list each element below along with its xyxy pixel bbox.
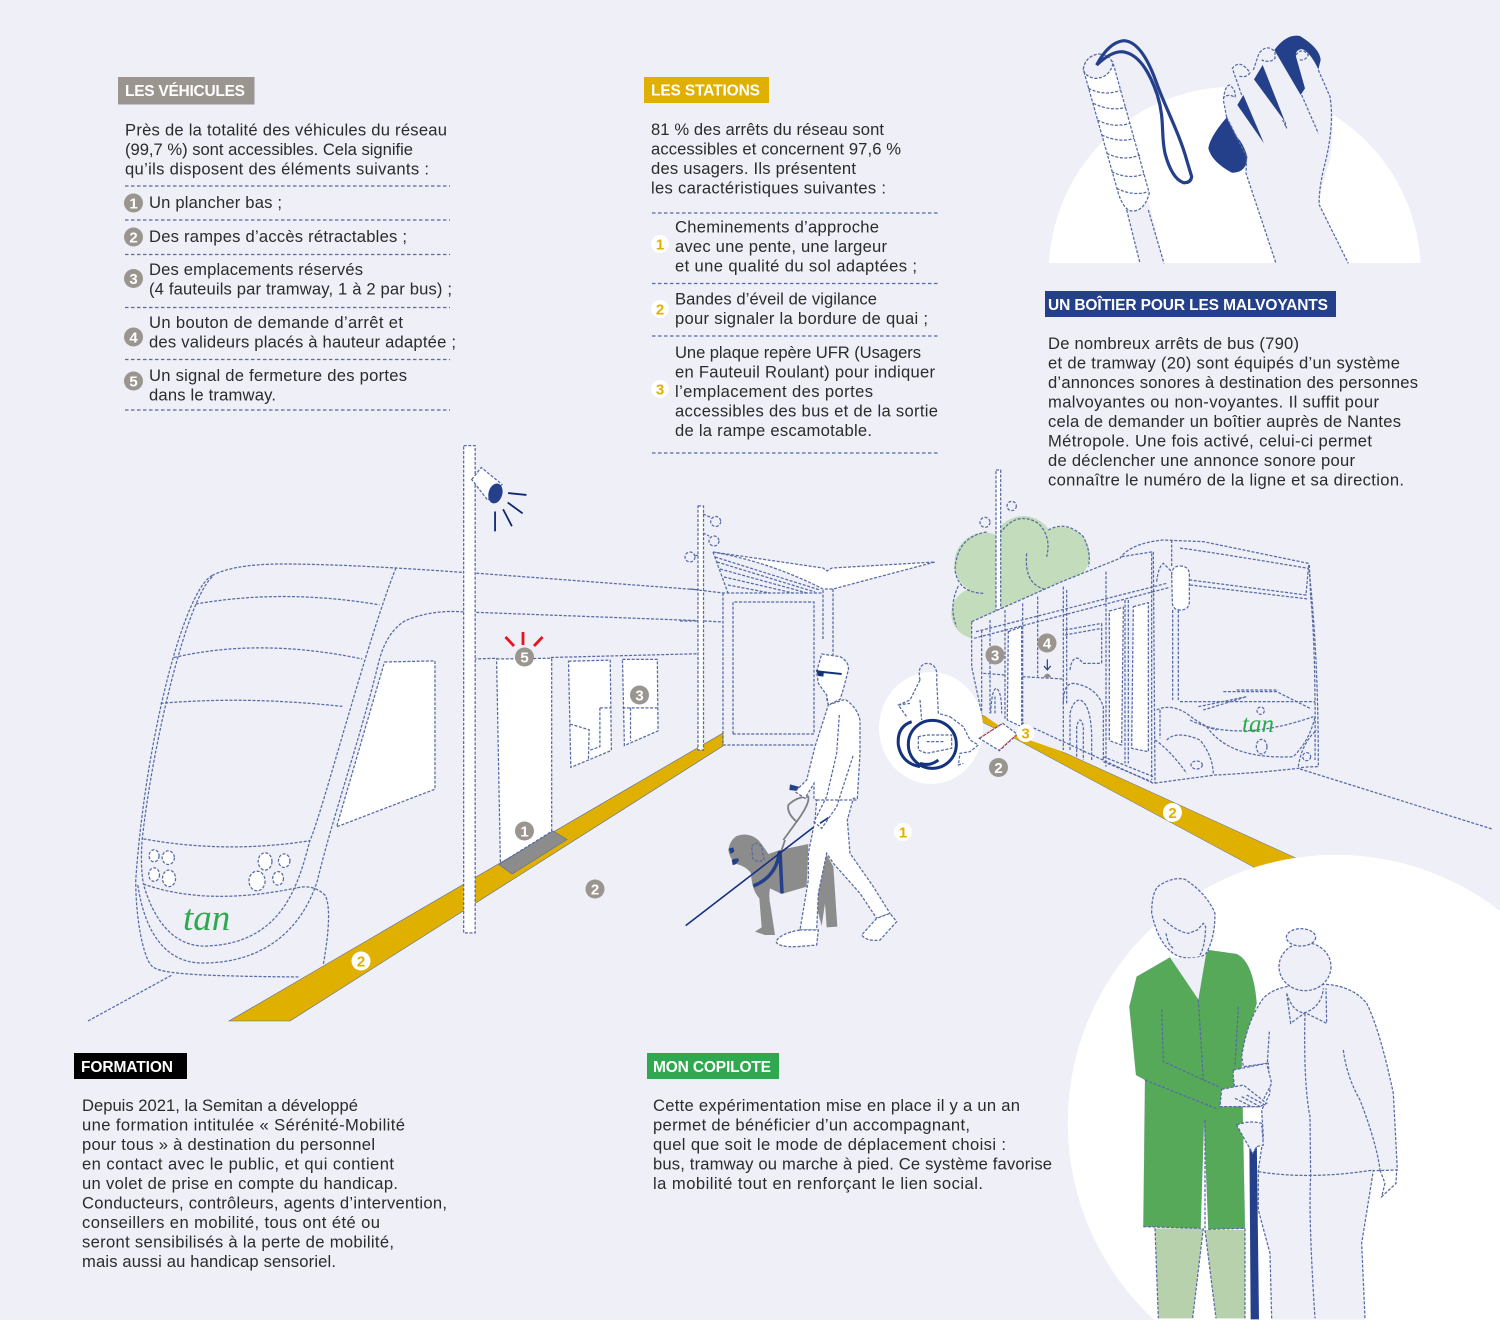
text: véhicules intro and list: Un signal de fermeture des portes	[149, 366, 407, 385]
text: stations intro and list: des usagers. Ils présentent	[651, 159, 856, 178]
text: formation: seront sensibilisés à la perte de mobilité,	[82, 1232, 394, 1252]
number badges: stations: 2	[656, 302, 664, 318]
text: stations intro and list: accessibles des bus et de la sortie	[675, 402, 938, 420]
text: stations intro and list: Cheminements d’approche	[675, 218, 879, 236]
elderly woman body	[1242, 984, 1397, 1320]
text: véhicules intro and list: Des emplacements réservés	[149, 260, 363, 279]
text: malvoyants: Métropole. Une fois activé, celui-ci permet	[1048, 432, 1372, 450]
illustration: tramway	[136, 564, 698, 977]
text: stations intro and list: et une qualité du sol adaptées ;	[675, 256, 917, 276]
scene badges: 2	[1168, 805, 1177, 822]
scene badges: 1	[520, 824, 529, 840]
text: mon copilote: bus, tramway ou marche à pied. Ce système favorise	[653, 1154, 1052, 1174]
red door-closing signal	[506, 632, 542, 646]
text: malvoyants: cela de demander un boîtier auprès de Nantes	[1048, 412, 1401, 431]
text: véhicules intro and list: qu’ils disposent des éléments suivants :	[125, 160, 429, 178]
line: road edge	[1300, 769, 1492, 829]
lamp post with light	[464, 446, 526, 933]
heading: les stations	[644, 77, 769, 103]
heading: formation: FORMATION	[81, 1059, 173, 1076]
scene badges: 3	[991, 648, 999, 664]
text: formation: Conducteurs, contrôleurs, agents d’intervention,	[82, 1194, 447, 1212]
logo: tan on tramway: tan	[183, 898, 230, 939]
illustration: tree and bus	[951, 470, 1318, 783]
illustration: station shelter	[680, 506, 935, 750]
text: stations intro and list: Une plaque repère UFR (Usagers	[675, 343, 921, 362]
man silhouette	[795, 699, 890, 930]
text: malvoyants: de déclencher une annonce sonore pour	[1048, 451, 1355, 470]
panel: mon copilote	[647, 1053, 1052, 1193]
elderly woman's cane	[1249, 1133, 1259, 1319]
number badges: véhicules: 2	[129, 230, 138, 246]
number badges: véhicules	[124, 194, 143, 390]
text: formation	[82, 1096, 447, 1271]
text: véhicules intro and list: Des rampes d’accès rétractables ;	[149, 227, 407, 246]
text: véhicules intro and list: des valideurs placés à hauteur adaptée ;	[149, 332, 456, 352]
scene badges: 3	[1021, 726, 1030, 742]
scene badges: 4	[1043, 636, 1052, 652]
illustration: blind man with guide dog and cane	[686, 654, 897, 947]
text: stations intro and list: accessibles et concernent 97,6 %	[651, 140, 901, 158]
number badges: véhicules: 4	[129, 330, 138, 346]
illustration: carer and elderly woman with cane	[1129, 879, 1397, 1320]
low floor plate	[499, 831, 567, 874]
text: véhicules intro and list: Près de la totalité des véhicules du réseau	[125, 120, 447, 140]
text: formation: un volet de prise en compte du handicap.	[82, 1174, 398, 1193]
heading: malvoyants	[1045, 291, 1336, 317]
scene badges: 2	[994, 760, 1003, 777]
heading: mon copilote: MON COPILOTE	[653, 1059, 771, 1076]
scene badges: 5	[520, 650, 529, 666]
panel: un boîtier pour les malvoyants	[1045, 291, 1418, 490]
hands	[1233, 1063, 1272, 1107]
white circle backdrop: carers	[1068, 855, 1500, 1320]
text: véhicules intro and list: dans le tramway.	[149, 386, 276, 404]
scene badges: 2	[357, 954, 365, 970]
text: formation: en contact avec le public, et qui contient	[82, 1154, 394, 1174]
illustration: wheelchair user and ramp	[879, 663, 1017, 784]
text: malvoyants	[1048, 334, 1418, 490]
scene badges: 2	[591, 882, 599, 898]
text: stations intro and list: les caractéristiques suivantes :	[651, 178, 886, 198]
panel: les véhicules	[118, 77, 456, 410]
yellow tactile strip: bus	[982, 715, 1320, 892]
text: véhicules intro and list: (4 fauteuils par tramway, 1 à 2 par bus) ;	[149, 280, 452, 298]
text: stations intro and list: l’emplacement des portes	[675, 382, 873, 401]
heading: les stations: LES STATIONS	[651, 82, 760, 100]
number badges: stations: 3	[656, 382, 664, 398]
text: malvoyants: connaître le numéro de la ligne et sa direction.	[1048, 470, 1404, 490]
guide dog	[728, 784, 837, 935]
text: véhicules intro and list: Un plancher bas ;	[149, 193, 282, 212]
text: formation: une formation intitulée « Sérénité-Mobilité	[82, 1116, 405, 1134]
panel: formation	[74, 1053, 447, 1271]
scene badges	[352, 634, 1182, 970]
text: stations intro and list: pour signaler la bordure de quai ;	[675, 309, 928, 328]
text: stations intro and list	[651, 120, 938, 440]
number badges: stations	[651, 235, 669, 398]
yellow tactile strip: tramway	[229, 733, 723, 1021]
text: malvoyants: et de tramway (20) sont équipés d’un système	[1048, 354, 1400, 372]
text: stations intro and list: en Fauteuil Roulant) pour indiquer	[675, 362, 935, 382]
number badges: stations: 1	[656, 236, 664, 254]
text: mon copilote	[653, 1096, 1052, 1193]
text: stations intro and list: Bandes d’éveil de vigilance	[675, 290, 877, 308]
number badges: véhicules: 1	[129, 196, 138, 212]
line: tram road edge	[88, 975, 172, 1021]
text: formation: Depuis 2021, la Semitan a développé	[82, 1096, 358, 1115]
text: véhicules intro and list: Un bouton de demande d’arrêt et	[149, 313, 403, 332]
text: malvoyants: d’annonces sonores à destination des personnes	[1048, 373, 1418, 392]
carer coat	[1129, 950, 1257, 1229]
scene badges: 3	[635, 688, 644, 704]
text: malvoyants: De nombreux arrêts de bus (790)	[1048, 334, 1299, 353]
panel: les stations	[644, 77, 939, 453]
text: stations intro and list: avec une pente, une largeur	[675, 237, 887, 256]
illustration: cane and hand with remote box	[1049, 36, 1420, 263]
text: formation: conseillers en mobilité, tous ont été ou	[82, 1213, 380, 1232]
text: stations intro and list: de la rampe escamotable.	[675, 421, 872, 440]
text: formation: pour tous » à destination du personnel	[82, 1135, 375, 1154]
carer head	[1152, 879, 1215, 958]
text: mon copilote: la mobilité tout en renforçant le lien social.	[653, 1174, 983, 1193]
text: véhicules intro and list	[125, 120, 456, 404]
heading: les véhicules: LES VÉHICULES	[125, 83, 245, 100]
number badges: véhicules: 5	[129, 374, 138, 390]
text: mon copilote: quel que soit le mode de déplacement choisi :	[653, 1135, 1006, 1154]
carer trousers	[1155, 1228, 1245, 1318]
heading: les véhicules	[118, 77, 254, 104]
text: véhicules intro and list: (99,7 %) sont accessibles. Cela signifie	[125, 140, 413, 159]
text: malvoyants: malvoyantes ou non-voyantes. Il suffit pour	[1048, 392, 1379, 412]
heading: formation	[74, 1053, 187, 1079]
text: formation: mais aussi au handicap sensoriel.	[82, 1252, 336, 1271]
text: mon copilote: Cette expérimentation mise en place il y a un an	[653, 1096, 1020, 1115]
logo: tan on bus: tan	[1242, 711, 1274, 738]
number badges: véhicules: 3	[129, 271, 138, 288]
heading: malvoyants: UN BOÎTIER POUR LES MALVOYANTS	[1048, 296, 1328, 314]
scene badges: 1	[899, 824, 907, 842]
heading: mon copilote	[647, 1053, 779, 1079]
text: stations intro and list: 81 % des arrêts du réseau sont	[651, 120, 884, 139]
text: mon copilote: permet de bénéficier d’un accompagnant,	[653, 1116, 970, 1134]
